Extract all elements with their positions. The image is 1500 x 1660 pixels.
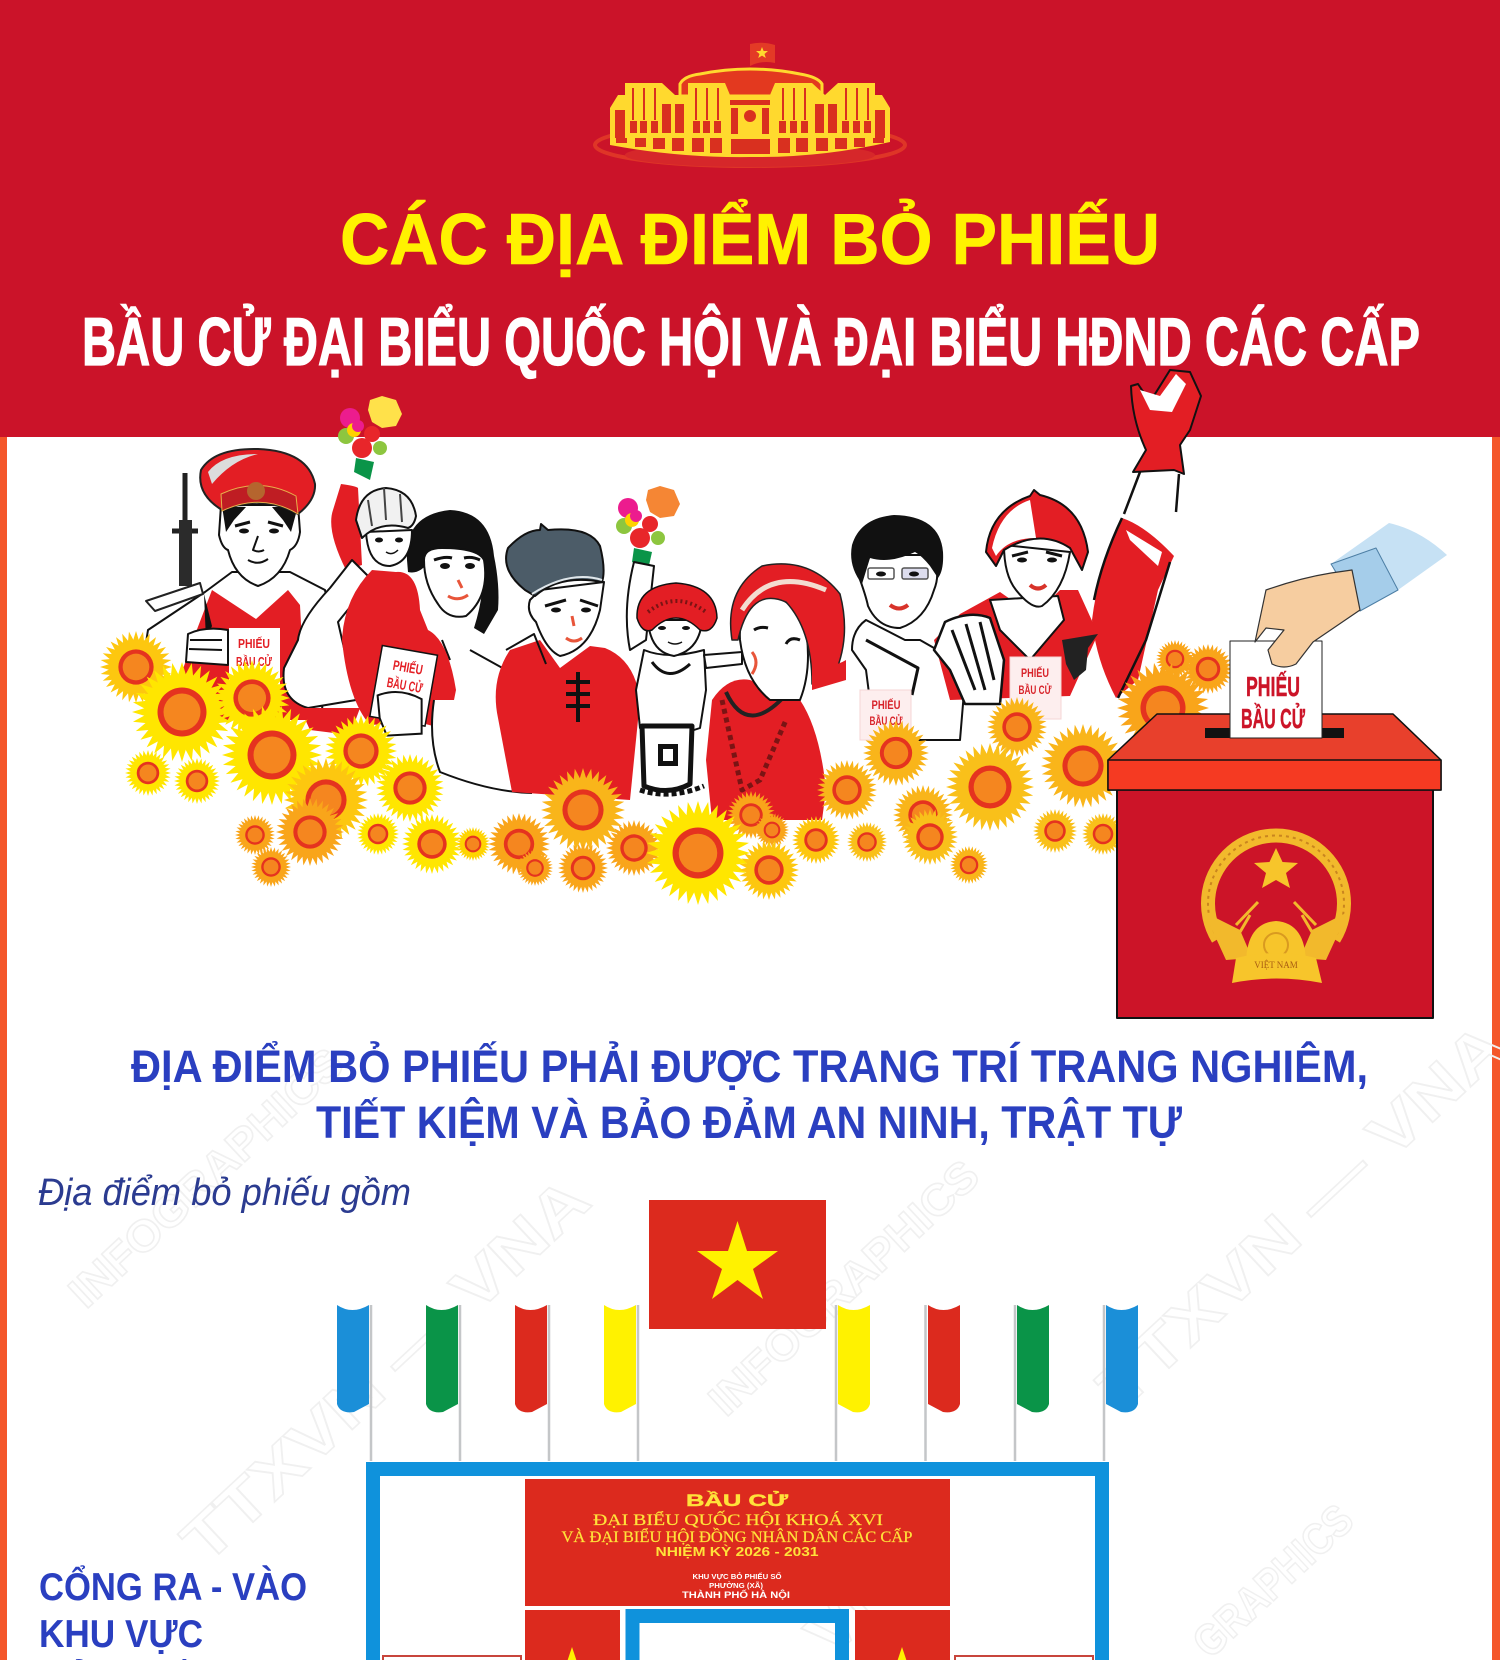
election banner [525, 1479, 950, 1606]
illustration: man in dark hat [496, 524, 640, 800]
election banner: THÀNH PHỐ HÀ NỘI [682, 1589, 790, 1600]
central door frame [632, 1616, 842, 1660]
box body [1117, 788, 1433, 1018]
pennants: festival flags [337, 1305, 1138, 1412]
ballot paper: PHIẾU [1246, 671, 1300, 702]
national emblem: VIỆT NAM [1254, 960, 1298, 970]
side borders [0, 437, 1500, 1660]
left notice board [383, 1656, 521, 1660]
ballot paper [1230, 641, 1322, 738]
illustration: mother and child with bouquet [284, 396, 532, 800]
ballot held by mother: PHIẾU [392, 657, 424, 678]
election banner: VÀ ĐẠI BIỂU HỘI ĐỒNG NHÂN DÂN CÁC CẤP [562, 1528, 912, 1546]
header band [0, 0, 1500, 437]
section heading [131, 1041, 1368, 1148]
election banner: BẦU CỬ [686, 1491, 789, 1510]
ballot box [1108, 523, 1447, 1018]
illustration: child with bouquet [616, 486, 742, 794]
illustration: man with glasses [851, 515, 965, 740]
polling gate frame [373, 1469, 1102, 1660]
ballot held by worker [1010, 657, 1061, 719]
ballot held by mother: BẦU CỬ [386, 673, 424, 696]
italic intro: Địa điểm bỏ phiếu gồm [38, 1172, 411, 1214]
ballot held by soldier [229, 628, 280, 686]
illustration: soldier [140, 449, 330, 720]
left flag panel [525, 1610, 620, 1660]
ballot paper: BẦU CỬ [1241, 702, 1305, 734]
sunflowers [94, 625, 1237, 914]
ballot held by man with glasses: PHIẾU [872, 697, 900, 712]
section heading: ĐỊA ĐIỂM BỎ PHIẾU PHẢI ĐƯỢC TRANG TRÍ TRANG NGHIÊM, [131, 1041, 1368, 1092]
box lid [1108, 714, 1441, 790]
national flag [649, 1200, 826, 1329]
ballot held by man with glasses: BẦU CỬ [870, 713, 903, 728]
election banner: KHU VỰC BỎ PHIẾU SỐ [692, 1571, 782, 1581]
ballot held by worker: PHIẾU [1021, 665, 1049, 680]
election banner: PHƯỜNG (XÃ) [709, 1581, 763, 1590]
ballot held by worker: BẦU CỬ [1018, 682, 1052, 697]
illustration: worker raising gloved hand [934, 370, 1201, 704]
election banner: NHIỆM KỲ 2026 - 2031 [656, 1544, 818, 1559]
section heading: TIẾT KIỆM VÀ BẢO ĐẢM AN NINH, TRẬT TỰ [316, 1097, 1183, 1148]
ballot held by mother [367, 645, 437, 742]
pennant poles [371, 1305, 1104, 1461]
hand [1255, 570, 1360, 667]
side label: entrance gate [39, 1564, 307, 1660]
right flag panel [855, 1610, 950, 1660]
illustration: woman in red headwrap [706, 564, 846, 820]
hand sleeve [1331, 523, 1447, 611]
side label: entrance gate: KHU VỰC [39, 1613, 203, 1656]
watermarks: TTXVN — VNA [1084, 1010, 1500, 1422]
watermarks: INFOGRAPHICS [699, 1151, 989, 1425]
national emblem [1204, 836, 1348, 983]
ballot held by man with glasses [860, 690, 911, 740]
right notice board [955, 1656, 1093, 1660]
ballot held by soldier: BẦU CỬ [236, 654, 272, 669]
election banner: ĐẠI BIỂU QUỐC HỘI KHOÁ XVI [593, 1511, 883, 1529]
icon: National Assembly building [595, 43, 905, 167]
watermarks: TTXVN — VNA [168, 1164, 603, 1576]
ballot held by soldier: PHIẾU [238, 636, 270, 651]
title: CÁC ĐỊA ĐIỂM BỎ PHIẾU [340, 199, 1160, 280]
watermarks: INFOGRAPHICS [59, 1039, 353, 1317]
watermarks [59, 1010, 1500, 1660]
side label: entrance gate: CỔNG RA - VÀO [39, 1564, 307, 1609]
